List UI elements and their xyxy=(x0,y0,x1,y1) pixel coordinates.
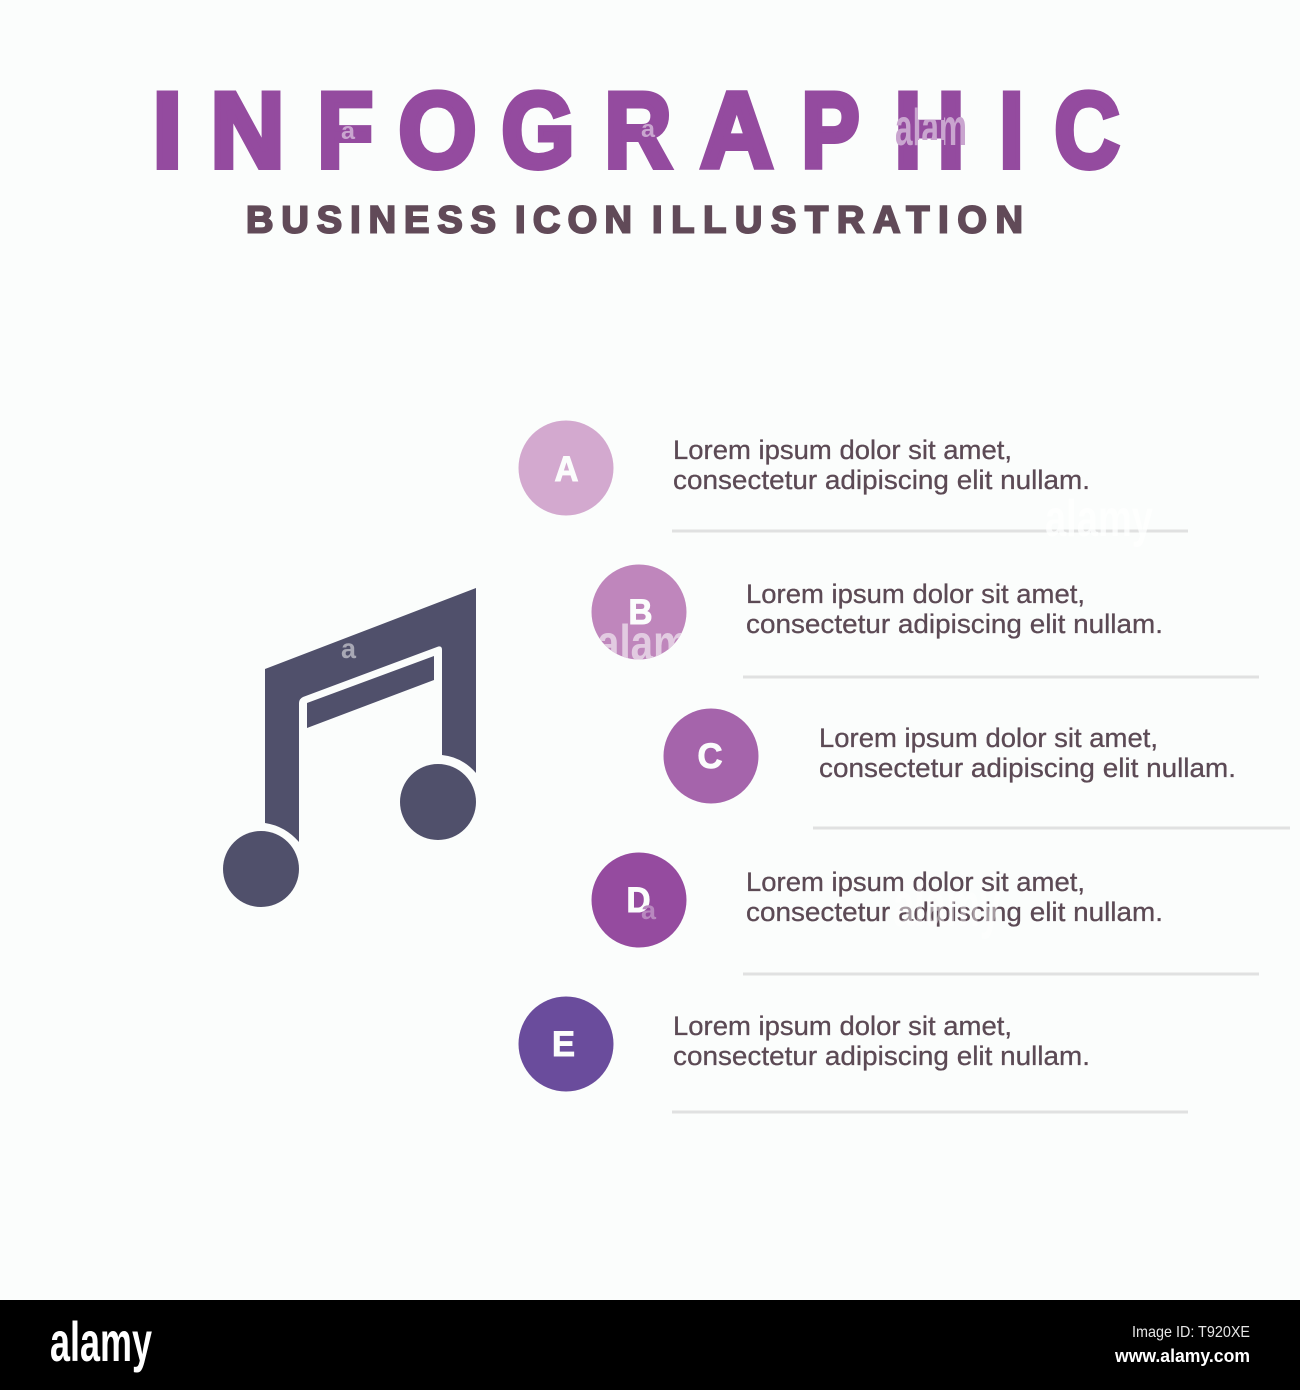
item C: C xyxy=(698,737,722,776)
website: www.alamy.com xyxy=(1114,1346,1250,1366)
alamy logo: alamy xyxy=(50,1310,152,1373)
item E xyxy=(518,996,1188,1114)
icon: music note xyxy=(223,588,476,907)
item D xyxy=(592,852,1259,976)
subtitle: BUSINESS xyxy=(246,200,496,242)
item A: Lorem ipsum dolor sit amet, xyxy=(673,435,1012,465)
image id: Image ID: T920XE xyxy=(1132,1324,1250,1341)
subtitle xyxy=(246,200,1023,242)
subtitle: ICON xyxy=(515,200,632,242)
item B: Lorem ipsum dolor sit amet, xyxy=(746,579,1085,609)
watermark overlays: alamy xyxy=(1045,490,1153,548)
item C xyxy=(664,708,1290,830)
title: R xyxy=(604,70,672,190)
item D: Lorem ipsum dolor sit amet, xyxy=(746,867,1085,897)
watermark overlays: alam xyxy=(597,615,689,671)
title: A xyxy=(700,70,773,190)
item E: E xyxy=(552,1025,575,1064)
watermark overlays xyxy=(341,99,1153,940)
item A: A xyxy=(554,450,578,489)
item B: B xyxy=(628,593,652,632)
watermark overlays: a xyxy=(341,118,356,145)
subtitle: ILLUSTRATION xyxy=(652,200,1023,242)
title xyxy=(152,70,1120,190)
item A: consectetur adipiscing elit nullam. xyxy=(673,465,1090,495)
item D: consectetur adipiscing elit nullam. xyxy=(746,897,1163,927)
watermark overlays: alam xyxy=(895,99,967,157)
item B: consectetur adipiscing elit nullam. xyxy=(746,609,1163,639)
item C: consectetur adipiscing elit nullam. xyxy=(819,753,1236,783)
watermark overlays: a xyxy=(641,895,657,925)
watermark overlays: alamy xyxy=(893,871,1001,940)
item E: consectetur adipiscing elit nullam. xyxy=(673,1041,1090,1071)
footer bar xyxy=(0,1300,1300,1390)
watermark overlays: a xyxy=(341,633,356,664)
item D: D xyxy=(626,881,650,920)
watermark overlays: a xyxy=(641,116,656,143)
item E: Lorem ipsum dolor sit amet, xyxy=(673,1011,1012,1041)
title: P xyxy=(802,70,860,190)
title: I xyxy=(152,70,182,190)
title: N xyxy=(210,70,284,190)
item B xyxy=(592,564,1259,678)
item C: Lorem ipsum dolor sit amet, xyxy=(819,723,1158,753)
title: I xyxy=(1000,70,1024,190)
title: C xyxy=(1054,70,1120,190)
title: G xyxy=(502,70,574,190)
title: O xyxy=(398,70,476,190)
item A xyxy=(518,420,1188,532)
title: F xyxy=(318,70,373,190)
title: H xyxy=(894,70,964,190)
